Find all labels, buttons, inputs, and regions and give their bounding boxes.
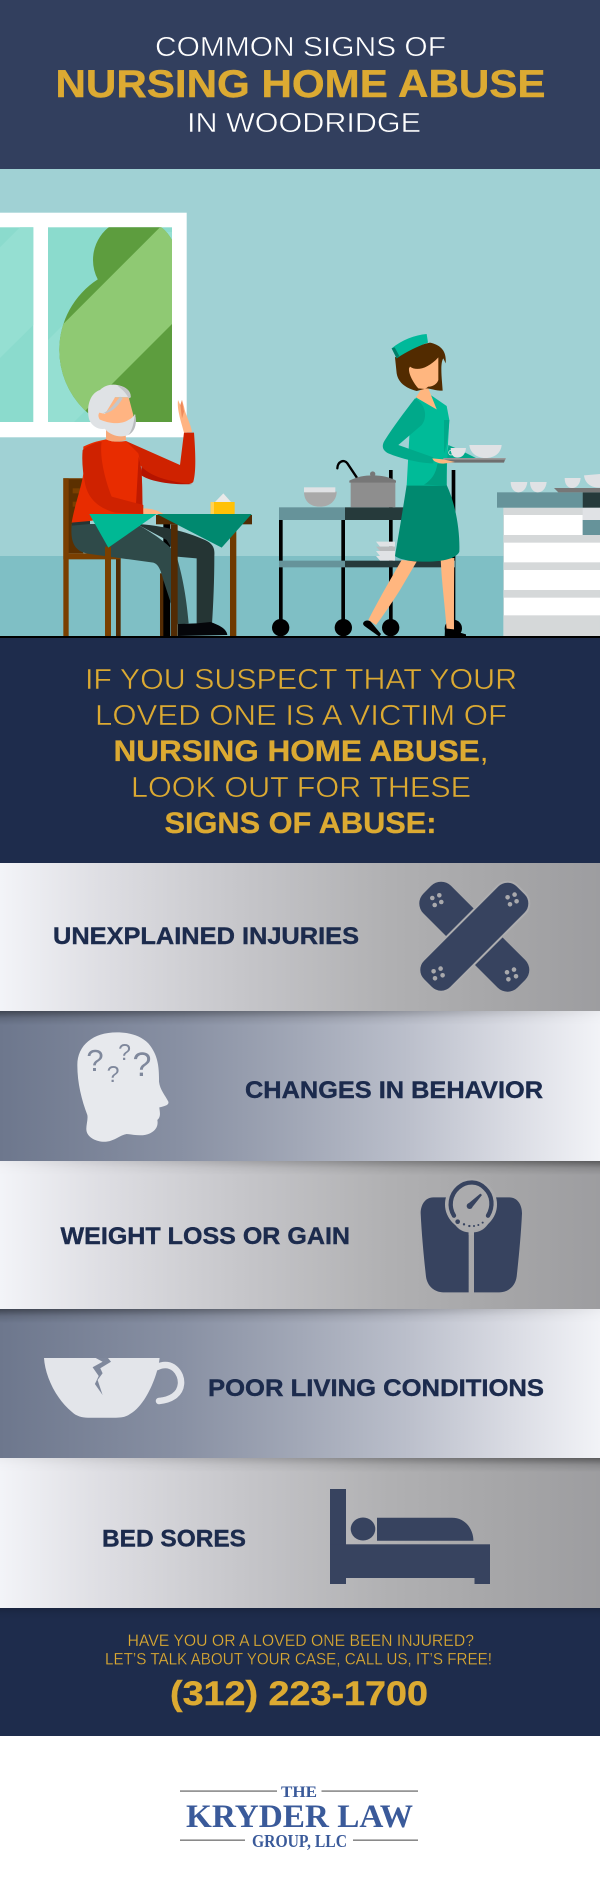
logo line 2: KRYDER LAW [186,1799,413,1835]
table front leg [171,524,178,636]
tray with dishes [432,445,506,464]
face [409,357,438,389]
tissue box [211,493,235,514]
uniform top [407,395,449,486]
shoes [363,621,381,637]
panel: bed sores [0,1458,600,1608]
intro line 3: NURSING HOME ABUSE , [114,735,488,768]
chair back [63,478,121,636]
icon: cracked cup [44,1358,181,1418]
cta line 1: HAVE YOU OR A LOVED ONE BEEN INJURED? [128,1631,474,1650]
icon: head with question marks: ? [107,1061,119,1087]
nurse [363,334,506,637]
sweater [72,439,163,523]
title line 1: COMMON SIGNS OF [155,31,446,62]
label: CHANGES IN BEHAVIOR [245,1077,543,1104]
title line 2: NURSING HOME ABUSE [56,63,546,106]
raised arm [126,400,195,484]
table back legs [156,515,252,636]
panel: unexplained injuries [0,863,600,1011]
tree [59,227,172,422]
logo line 1: THE [281,1784,317,1801]
serving cart, counter and nurse [272,334,600,637]
intro line 2: LOVED ONE IS A VICTIM OF [95,700,507,732]
elderly man at table [63,385,252,636]
icon: head with question marks: ? [118,1039,131,1065]
window with tree [0,212,187,438]
label: POOR LIVING CONDITIONS [208,1375,544,1402]
counter [497,474,600,637]
tablecloth [89,514,252,548]
plates [376,542,395,561]
bent arm [383,398,433,463]
cta line 2: LET’S TALK ABOUT YOUR CASE, CALL US, IT’S FREE! [105,1650,492,1668]
icon: head with question marks [77,1032,168,1142]
label: BED SORES [102,1526,246,1552]
legs [368,560,417,625]
icon: bathroom scale [421,1178,522,1292]
skirt [395,485,459,562]
cap [392,334,428,358]
trousers [71,521,214,626]
floor line [0,636,600,638]
panel: weight loss or gain [0,1161,600,1309]
panel: intro text [0,638,600,863]
logo line 3: GROUP, LLC [252,1831,347,1851]
icon: head with question marks: ? [86,1043,104,1078]
shoes [178,622,227,636]
neck [106,428,126,442]
panel: header [0,0,600,169]
intro line 5: SIGNS OF ABUSE: [164,807,436,840]
label: WEIGHT LOSS OR GAIN [60,1223,350,1250]
icon: head with question marks: ? [133,1046,151,1084]
cooking pot with ladle [337,461,396,507]
phone number: (312) 223-1700 [170,1675,428,1713]
serving cart [272,470,462,637]
intro line 1: IF YOU SUSPECT THAT YOUR [85,664,517,696]
title line 3: IN WOODRIDGE [187,107,421,138]
far sleeve [447,445,477,460]
panel: call to action [0,1608,600,1736]
icon: crossed bandages [413,876,535,998]
icon: patient in bed [330,1489,490,1584]
hair [395,343,446,391]
intro line 4: LOOK OUT FOR THESE [131,772,471,804]
chair front leg [105,547,111,636]
panel: poor living conditions [0,1309,600,1458]
label: UNEXPLAINED INJURIES [53,923,359,950]
head [88,385,136,436]
panel: changes in behavior [0,1011,600,1161]
bowl on cart [304,487,337,507]
panel: nursing home illustration [0,169,600,638]
logo: the kryder law group [180,1784,418,1851]
neck [416,388,437,409]
